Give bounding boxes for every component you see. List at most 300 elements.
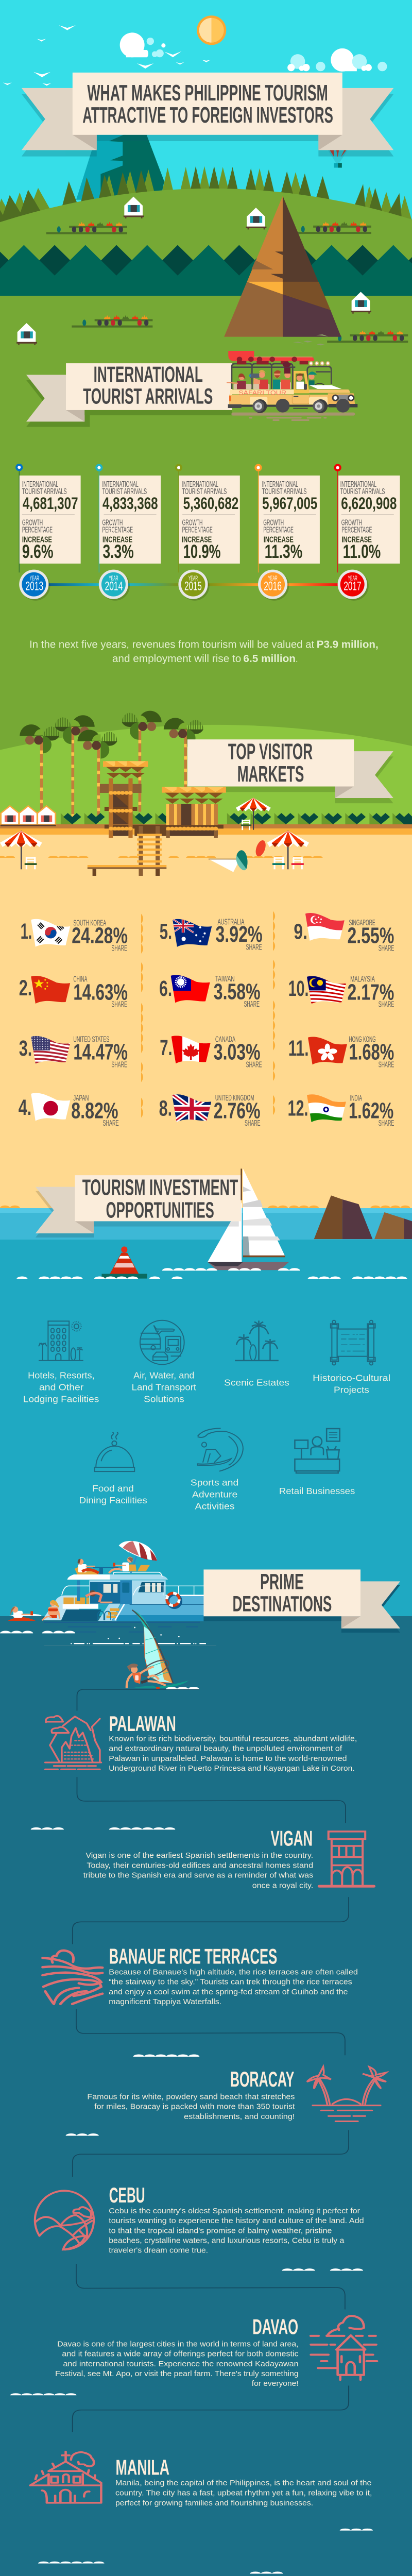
2017 card: INTERNATIONAL xyxy=(340,480,376,489)
market 12 india xyxy=(288,1094,394,1126)
deep water xyxy=(0,1616,412,2576)
upper deck xyxy=(62,1572,204,1596)
text: davao: for everyone! xyxy=(252,2380,299,2388)
heading xyxy=(228,739,313,787)
market 4 japan: 4. xyxy=(19,1095,31,1120)
text: palawan: Palawan in unparalleled. Palawan is home to the world-renowned xyxy=(109,1755,347,1763)
icon: hut and cloud xyxy=(311,2316,377,2380)
heading: palawan: PALAWAN xyxy=(109,1711,176,1736)
market 5 australia: 5. xyxy=(160,919,172,943)
tourism investment opportunities banner xyxy=(36,1168,242,1238)
sailboat xyxy=(208,1168,289,1270)
year badge 2016: 2016 xyxy=(264,579,282,593)
market 6 taiwan: SHARE xyxy=(244,1000,260,1009)
market 4 japan: SHARE xyxy=(102,1119,119,1128)
market 8 united kingdom: SHARE xyxy=(245,1119,261,1128)
surfer figure xyxy=(127,1664,166,1688)
market 2 china xyxy=(19,973,128,1009)
cabin xyxy=(77,1580,166,1604)
text: cebu: tourists wanting to experience the history and culture of the land. Add xyxy=(109,2217,364,2225)
year badge 2014: YEAR xyxy=(109,574,118,582)
passengers xyxy=(227,362,291,389)
market 9 singapore: SHARE xyxy=(379,944,394,953)
text: palawan: and extraordinary natural beauty, the unpolluted environment of xyxy=(109,1745,342,1753)
top visitor markets banner xyxy=(187,739,354,787)
lookout tower xyxy=(100,761,148,838)
palm trunks xyxy=(42,725,185,822)
orange sand strip xyxy=(0,828,412,835)
2013 card: INTERNATIONAL xyxy=(22,480,58,489)
market 6 taiwan: TAIWAN xyxy=(215,975,235,984)
text: davao: Festival, see Mt. Apo, or visit the pearl farm. There's truly something xyxy=(55,2370,299,2378)
market 11 hong kong: 1.68% xyxy=(349,1040,394,1065)
2015 card: INCREASE xyxy=(182,536,212,545)
market 11 hong kong xyxy=(288,1034,394,1069)
2015 card: TOURIST ARRIVALS xyxy=(182,487,227,496)
market 1 south korea: 24.28% xyxy=(72,923,128,948)
2017 card xyxy=(334,464,400,564)
text: banaue: magnificent Tappiya Waterfalls. xyxy=(109,1998,221,2006)
2014 card: TOURIST ARRIVALS xyxy=(102,487,147,496)
sail xyxy=(132,1610,173,1683)
investment labels: Food and xyxy=(92,1483,134,1494)
investment labels: Solutions xyxy=(144,1394,184,1404)
market 10 malaysia: SHARE xyxy=(379,1001,394,1009)
icon: hotel xyxy=(39,1321,83,1361)
ribbon shadow xyxy=(94,1221,239,1227)
market 8 united kingdom: 2.76% xyxy=(214,1098,261,1123)
sea background xyxy=(0,1208,412,2576)
market 4 japan xyxy=(19,1090,119,1128)
market 7 canada: SHARE xyxy=(246,1060,262,1069)
text: vigan: Vigan is one of the earliest Spanish settlements in the country. xyxy=(85,1852,313,1860)
heading: MARKETS xyxy=(237,761,304,787)
year badge 2013: 2013 xyxy=(25,579,43,593)
year badge 2017 xyxy=(338,570,369,601)
tree line xyxy=(0,166,412,226)
bikini tourist xyxy=(42,1600,60,1620)
2016 card: PERCENTAGE xyxy=(263,526,294,535)
market 3 united states: 3. xyxy=(19,1036,32,1060)
text: davao: Davao is one of the largest cities in the world in terms of land area, xyxy=(57,2340,299,2348)
market 10 malaysia: 10. xyxy=(288,976,308,1001)
heading xyxy=(82,1175,238,1223)
2013 card: 9.6% xyxy=(22,541,54,562)
icon: rock island xyxy=(45,1716,101,1769)
heading: PRIME xyxy=(260,1570,304,1595)
heading xyxy=(83,362,213,409)
hot air balloon xyxy=(328,150,348,168)
2014 card: INTERNATIONAL xyxy=(102,480,139,489)
hero scene: sky and landscape xyxy=(0,15,412,762)
boom xyxy=(140,1657,171,1680)
text: banaue: “the stairway to the sky.” Tourists can trek through the rice terraces xyxy=(109,1978,352,1986)
text: cebu xyxy=(109,2207,364,2255)
sand xyxy=(0,835,412,1209)
year badge 2017: YEAR xyxy=(348,574,357,582)
year badge 2016 xyxy=(258,570,289,601)
seats xyxy=(233,382,291,389)
2013 card: 4,681,307 xyxy=(23,494,78,513)
bamboo hut xyxy=(162,787,226,838)
light green hill xyxy=(0,725,412,830)
stern deck xyxy=(42,1596,120,1621)
text: boracay: establishments, and counting! xyxy=(184,2113,295,2121)
text: banaue: and enjoy a cool swim at the spring-fed stream of Guihob and the xyxy=(109,1988,348,1996)
wheels xyxy=(252,399,350,413)
market 1 south korea: SOUTH KOREA xyxy=(73,919,107,927)
investment labels: Land Transport xyxy=(132,1382,196,1392)
investment labels: Sports and xyxy=(191,1478,238,1488)
sand wave marks xyxy=(0,856,323,858)
title xyxy=(82,80,333,128)
investment labels: Historico-Cultural xyxy=(313,1373,390,1383)
market 3 united states: 14.47% xyxy=(73,1040,128,1065)
2014 card xyxy=(95,464,161,564)
white wave marks xyxy=(10,2393,384,2576)
market 2 china: SHARE xyxy=(111,1001,127,1009)
ribbon panel xyxy=(66,363,232,410)
heading: OPPORTUNITIES xyxy=(106,1197,214,1223)
market 11 hong kong: 11. xyxy=(288,1036,308,1060)
2014 card: 3.3% xyxy=(102,541,134,562)
2013 card xyxy=(15,464,81,564)
beach houses xyxy=(1,806,56,825)
revenue statement: . xyxy=(296,653,298,665)
ground posts deck xyxy=(105,825,224,828)
banner shadows xyxy=(22,94,393,157)
parasol xyxy=(119,1541,157,1573)
heading: davao: DAVAO xyxy=(252,2314,298,2339)
market 9 singapore: 9. xyxy=(294,919,307,943)
umbrella left xyxy=(0,831,42,869)
tourists on boat xyxy=(75,1557,150,1602)
market 9 singapore xyxy=(295,913,394,951)
2013 card: PERCENTAGE xyxy=(22,526,53,535)
rocks xyxy=(314,1195,412,1239)
birds xyxy=(3,25,211,86)
board xyxy=(134,1681,189,1689)
life ring xyxy=(167,1593,181,1607)
investment labels: Air, Water, and xyxy=(133,1370,195,1381)
boracay xyxy=(87,2067,386,2121)
2016 card: INCREASE xyxy=(264,536,294,545)
2014 card: PERCENTAGE xyxy=(102,526,133,535)
distant birds near mountain xyxy=(293,334,329,345)
text: vigan: tribute to the Spanish era and serve as a reminder of what was xyxy=(83,1872,313,1879)
market 5 australia: AUSTRALIA xyxy=(217,918,245,926)
market 2 china: 2. xyxy=(19,976,32,1000)
ribbon tail xyxy=(36,1187,94,1238)
green hill and ground xyxy=(0,189,412,762)
text: davao: and it features a wide array of offerings perfect for both domestic xyxy=(62,2350,299,2358)
white spray xyxy=(9,1614,42,1616)
stairs and pier xyxy=(88,825,166,876)
text: manila xyxy=(115,2479,372,2507)
ribbon panel xyxy=(75,1175,241,1221)
market 5 australia: 3.92% xyxy=(215,922,263,947)
shadow strip xyxy=(84,410,232,415)
market 11 hong kong: HONG KONG xyxy=(349,1035,376,1044)
cab and driver xyxy=(294,371,324,393)
beach background xyxy=(0,824,412,1209)
market 11 hong kong: SHARE xyxy=(379,1060,394,1069)
2016 card: GROWTH xyxy=(263,518,284,527)
cebu xyxy=(35,2183,364,2255)
vigan xyxy=(83,1826,374,1890)
market 7 canada: CANADA xyxy=(215,1035,236,1044)
market 12 india: 12. xyxy=(288,1096,308,1120)
revenue statement: P3.9 million, xyxy=(317,639,379,651)
banner tail xyxy=(335,751,393,803)
investment labels: Dining Facilities xyxy=(79,1495,147,1505)
main title banner xyxy=(22,73,393,157)
tipped parasol xyxy=(209,850,249,872)
visitor markets list xyxy=(19,910,394,1128)
investment labels: Scenic Estates xyxy=(224,1377,289,1387)
palm crowns xyxy=(20,711,203,758)
investment labels: Activities xyxy=(195,1501,235,1512)
white wave marks xyxy=(0,1268,407,1633)
shore wave marks xyxy=(0,1206,410,1208)
2017 card: PERCENTAGE xyxy=(341,526,372,535)
text: cebu: traveler's dream come true. xyxy=(109,2247,208,2255)
heading: boracay: BORACAY xyxy=(230,2067,294,2091)
text: banaue: Because of Banaue's high altitude, the rice terraces are often called xyxy=(109,1968,358,1976)
2017 card: GROWTH xyxy=(341,518,362,527)
roof lights xyxy=(310,362,330,365)
international tourist arrivals banner xyxy=(26,362,232,427)
revenue statement xyxy=(29,639,379,665)
icon: food cloche xyxy=(95,1432,134,1471)
market 1 south korea: SHARE xyxy=(111,944,127,953)
2016 card: INTERNATIONAL xyxy=(262,480,298,489)
text: manila: perfect for growing families and flourishing businesses. xyxy=(115,2499,313,2507)
2015 card: 10.9% xyxy=(183,541,221,562)
market 12 india: 1.62% xyxy=(349,1098,393,1123)
mid water xyxy=(0,1240,412,1616)
roof rack xyxy=(228,351,314,364)
icon: palms xyxy=(235,1320,279,1361)
investment labels: Hotels, Resorts, xyxy=(28,1370,95,1381)
roll frame xyxy=(232,364,331,389)
market 8 united kingdom: UNITED KINGDOM xyxy=(215,1094,254,1103)
market 1 south korea: 1. xyxy=(21,919,32,943)
market 7 canada xyxy=(160,1033,262,1069)
text: boracay: for miles, Boracay is packed with more than 350 tourist xyxy=(94,2103,295,2111)
banaue rice terraces xyxy=(43,1944,358,2006)
2015 card: PERCENTAGE xyxy=(182,526,213,535)
2013 card: TOURIST ARRIVALS xyxy=(22,487,67,496)
icon: church xyxy=(30,2452,101,2503)
2017 card: INCREASE xyxy=(341,536,372,545)
market 12 india: SHARE xyxy=(379,1119,394,1128)
market 6 taiwan: 6. xyxy=(159,976,172,1001)
market 2 china: 14.63% xyxy=(73,979,128,1005)
shore band xyxy=(0,1208,412,1213)
market 8 united kingdom xyxy=(159,1092,261,1128)
2015 card: INTERNATIONAL xyxy=(182,480,218,489)
windsurfer xyxy=(127,1610,189,1689)
market 2 china: CHINA xyxy=(73,975,88,984)
vertical stems xyxy=(19,471,338,572)
heading: DESTINATIONS xyxy=(233,1592,332,1617)
background: sky xyxy=(0,0,412,227)
market 9 singapore: 2.55% xyxy=(347,923,394,948)
2015 card xyxy=(175,464,240,564)
market 9 singapore: SINGAPORE xyxy=(349,919,375,927)
2016 card: TOURIST ARRIVALS xyxy=(262,487,306,496)
jeep body xyxy=(229,385,355,404)
market 12 india: INDIA xyxy=(350,1094,363,1103)
hedge row xyxy=(61,813,412,824)
text: boracay xyxy=(87,2093,295,2121)
beach structures xyxy=(0,761,323,876)
year badge 2015: 2015 xyxy=(184,579,202,593)
2015 card: 5,360,682 xyxy=(183,494,238,513)
2014 card: 4,833,368 xyxy=(102,494,158,513)
banner tails xyxy=(22,88,393,150)
icon: two palms xyxy=(307,2067,386,2121)
market 1 south korea xyxy=(21,919,128,951)
2017 card: 11.0% xyxy=(343,541,381,562)
banner shadow xyxy=(187,787,335,792)
huts xyxy=(16,197,371,345)
shallow water xyxy=(0,1213,412,1240)
investment labels: and Other xyxy=(39,1382,83,1392)
sun xyxy=(197,15,226,45)
text: davao: and international tourists. Experience the renowned Kadayawan xyxy=(63,2360,299,2368)
investment labels: Projects xyxy=(334,1385,369,1395)
ribbon tail xyxy=(341,1581,400,1633)
house windows xyxy=(1,816,56,826)
text: manila: Manila, being the capital of the Philippines, is the heart and soul of the xyxy=(115,2479,371,2487)
investment labels xyxy=(23,1370,390,1512)
revenue statement: 6.5 million xyxy=(243,653,296,665)
umbrella right xyxy=(267,831,309,869)
investment labels: Adventure xyxy=(192,1489,237,1500)
beach divider scallops xyxy=(141,911,275,1117)
white wave marks xyxy=(66,2054,363,2271)
icon: tower xyxy=(319,1832,374,1886)
investment labels: Lodging Facilities xyxy=(23,1394,99,1404)
section: international tourist arrivals timeline xyxy=(15,464,400,665)
text: boracay: Famous for its white, powdery sand beach that stretches xyxy=(87,2093,295,2101)
2016 card: 11.3% xyxy=(265,541,302,562)
icon: terraces xyxy=(43,1951,102,2004)
text: vigan: once a royal city. xyxy=(252,1882,313,1890)
icon: retail xyxy=(295,1429,340,1473)
icon: scroll xyxy=(331,1320,375,1365)
market 7 canada: 3.03% xyxy=(214,1040,261,1065)
surfboard xyxy=(254,839,267,857)
market 3 united states: UNITED STATES xyxy=(73,1035,109,1044)
text: vigan xyxy=(83,1852,313,1890)
revenue statement: In the next five years, revenues from tourism will be valued at xyxy=(29,639,315,651)
jeep body: SAFARI TOUR xyxy=(238,389,286,397)
2016 card xyxy=(254,464,320,564)
buoy xyxy=(101,1246,147,1279)
year badge 2016: YEAR xyxy=(268,574,278,582)
icon: surfer xyxy=(198,1428,243,1471)
text: palawan: Underground River in Puerto Princesa and Kayangan Lake in Coron. xyxy=(109,1765,355,1773)
icon: transport xyxy=(140,1320,184,1364)
heading: vigan: VIGAN xyxy=(271,1826,313,1851)
water reflections xyxy=(44,1622,200,1633)
horizon thin line xyxy=(44,1645,216,1647)
2014 card: INCREASE xyxy=(102,536,132,545)
market 7 canada: 7. xyxy=(160,1036,173,1060)
davao xyxy=(55,2314,377,2388)
route line xyxy=(73,2009,349,2310)
2013 card: GROWTH xyxy=(22,518,43,527)
hull xyxy=(112,1596,204,1621)
2016 card: 5,967,005 xyxy=(262,494,317,513)
sparkles and dashes xyxy=(71,1627,206,1644)
text: cebu: to that the tropical island's promise of balmy weather, pristine xyxy=(109,2227,332,2235)
market 10 malaysia: MALAYSIA xyxy=(350,975,375,984)
chocolate hill mountain xyxy=(224,196,341,337)
sea scene: rocks, sailboat, buoy xyxy=(0,1168,412,1633)
icon: hills in circle xyxy=(35,2191,94,2249)
destinations: palawan to banaue xyxy=(31,1687,374,2006)
heading xyxy=(233,1570,332,1617)
2015 card: GROWTH xyxy=(182,518,202,527)
mountain behind banner xyxy=(76,135,164,200)
heading: TOP VISITOR xyxy=(228,739,313,764)
ground strip xyxy=(0,824,412,828)
white wave marks xyxy=(31,1687,199,1829)
text: davao xyxy=(55,2340,299,2388)
ribbon panel xyxy=(203,1569,360,1616)
market 3 united states xyxy=(19,1033,128,1069)
cruise boat with tourists xyxy=(8,1541,216,1646)
market 5 australia xyxy=(160,919,262,950)
revenue statement: and employment will rise to xyxy=(112,653,241,665)
market 3 united states: SHARE xyxy=(111,1060,127,1069)
heading: cebu: CEBU xyxy=(109,2183,145,2207)
beach chairs xyxy=(25,820,304,869)
year badge 2014: 2014 xyxy=(105,579,123,593)
market 6 taiwan: 3.58% xyxy=(214,979,261,1004)
text: manila: country. The city has a fast, upbeat rhythm yet a fun, relaxing vibe to it, xyxy=(115,2489,372,2497)
banner panel xyxy=(73,73,342,135)
heading: INTERNATIONAL xyxy=(94,362,203,387)
palawan xyxy=(45,1711,357,1773)
text: banaue xyxy=(109,1968,358,2006)
market 8 united kingdom: 8. xyxy=(159,1096,172,1120)
section: top visitor markets scene xyxy=(0,711,412,830)
ribbon shadow xyxy=(203,1616,341,1621)
destination: manila xyxy=(10,2386,384,2576)
route line xyxy=(73,1689,349,1944)
prime destinations banner xyxy=(203,1569,400,1633)
year badge 2015: YEAR xyxy=(188,574,198,582)
text: palawan: Known for its rich biodiversity, bountiful resources, abundant wildlife, xyxy=(109,1735,357,1743)
mast xyxy=(241,1168,242,1200)
timeline connector xyxy=(48,583,338,586)
year badge 2015 xyxy=(178,570,210,601)
market 10 malaysia xyxy=(288,973,394,1009)
safari jeep xyxy=(227,351,357,421)
year badge 2013: YEAR xyxy=(30,574,39,582)
2013 card: INCREASE xyxy=(22,536,52,545)
text: vigan: Today, their centuries-old edifices and ancestral homes stand xyxy=(87,1861,313,1870)
2014 card: GROWTH xyxy=(102,518,123,527)
market 4 japan: 8.82% xyxy=(71,1098,118,1123)
umbrella near hedge xyxy=(236,798,271,830)
market 5 australia: SHARE xyxy=(246,943,262,952)
